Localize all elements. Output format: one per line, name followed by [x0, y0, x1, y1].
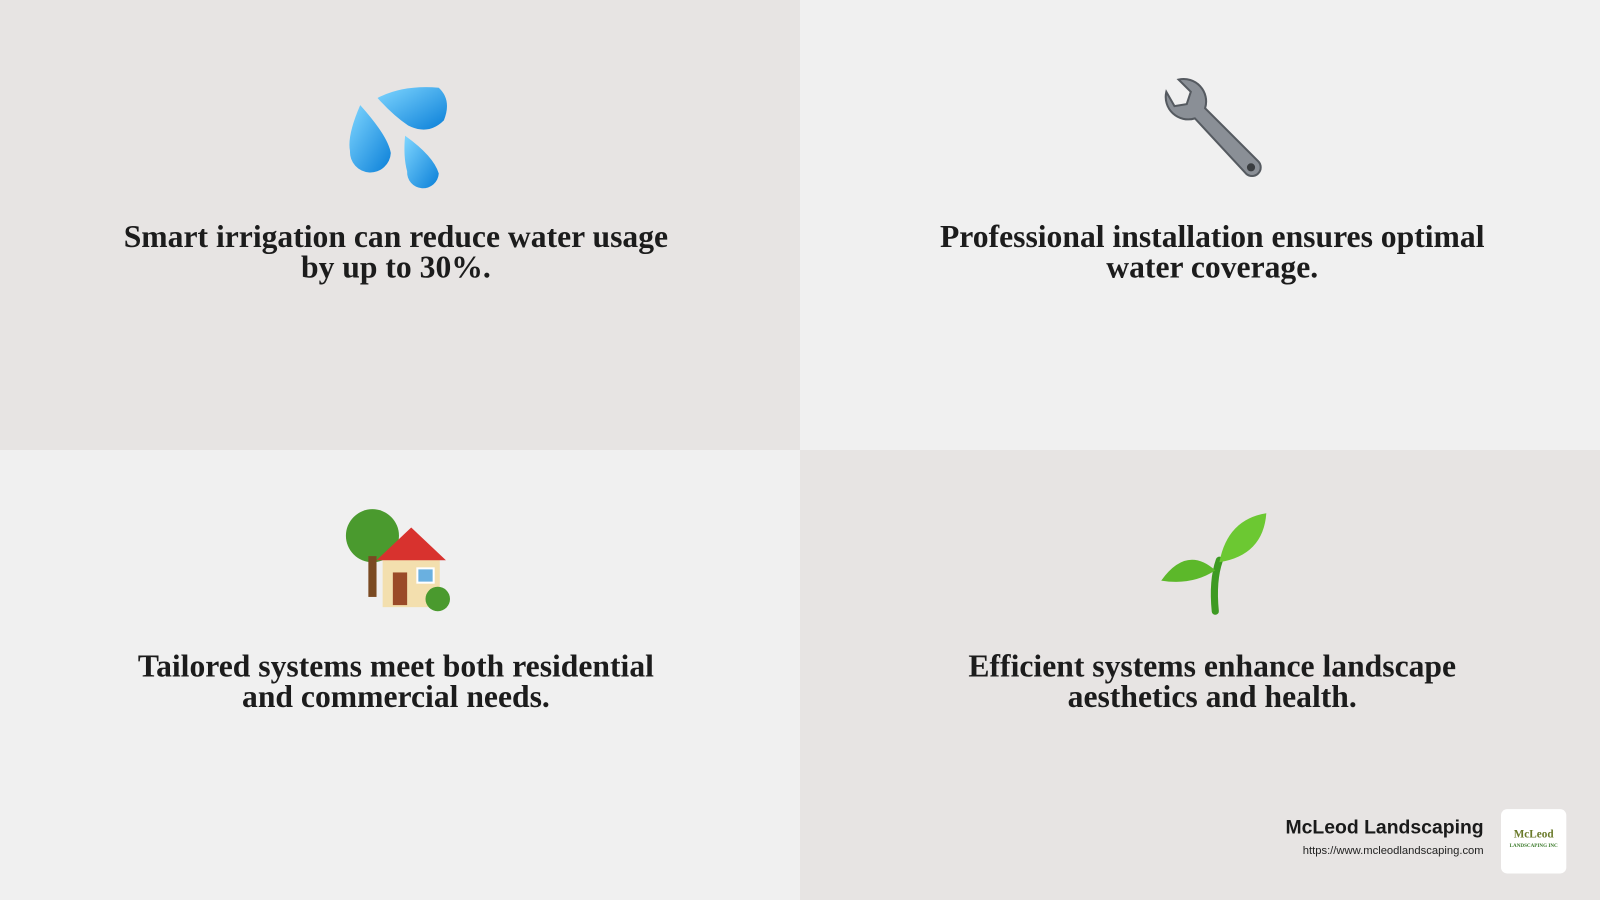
panel: water savings	[0, 0, 800, 450]
brand name: McLeod Landscaping	[1285, 817, 1484, 839]
text: landscape health	[968, 648, 1456, 714]
panel: aesthetics	[800, 450, 1600, 900]
logo: LANDSCAPING INC	[1510, 844, 1558, 849]
text: coverage: Professional installation ensures optimal	[940, 218, 1485, 254]
text: water usage: by up to 30%.	[301, 249, 491, 285]
brand url: https://www.mcleodlandscaping.com	[1303, 845, 1484, 857]
brand block	[1285, 809, 1566, 874]
text: water usage: Smart irrigation can reduce water usage	[124, 218, 668, 254]
logo	[1501, 809, 1566, 873]
icon: wrench	[1164, 78, 1262, 177]
text: water usage	[124, 218, 668, 285]
icon: house with tree	[346, 509, 450, 612]
text: coverage	[940, 218, 1485, 285]
text: residential commercial	[138, 648, 654, 714]
logo: McLeod	[1514, 829, 1554, 841]
text: residential commercial: and commercial needs.	[242, 679, 550, 714]
text: landscape health: aesthetics and health.	[1068, 679, 1357, 714]
panel: tailored systems	[0, 450, 800, 900]
icon: sprout	[1161, 513, 1266, 615]
text: landscape health: Efficient systems enhance landscape	[968, 648, 1456, 684]
text: residential commercial: Tailored systems meet both residential	[138, 648, 654, 684]
panel: installation	[800, 0, 1600, 450]
text: coverage: water coverage.	[1106, 249, 1318, 285]
icon: water drops	[349, 87, 447, 188]
